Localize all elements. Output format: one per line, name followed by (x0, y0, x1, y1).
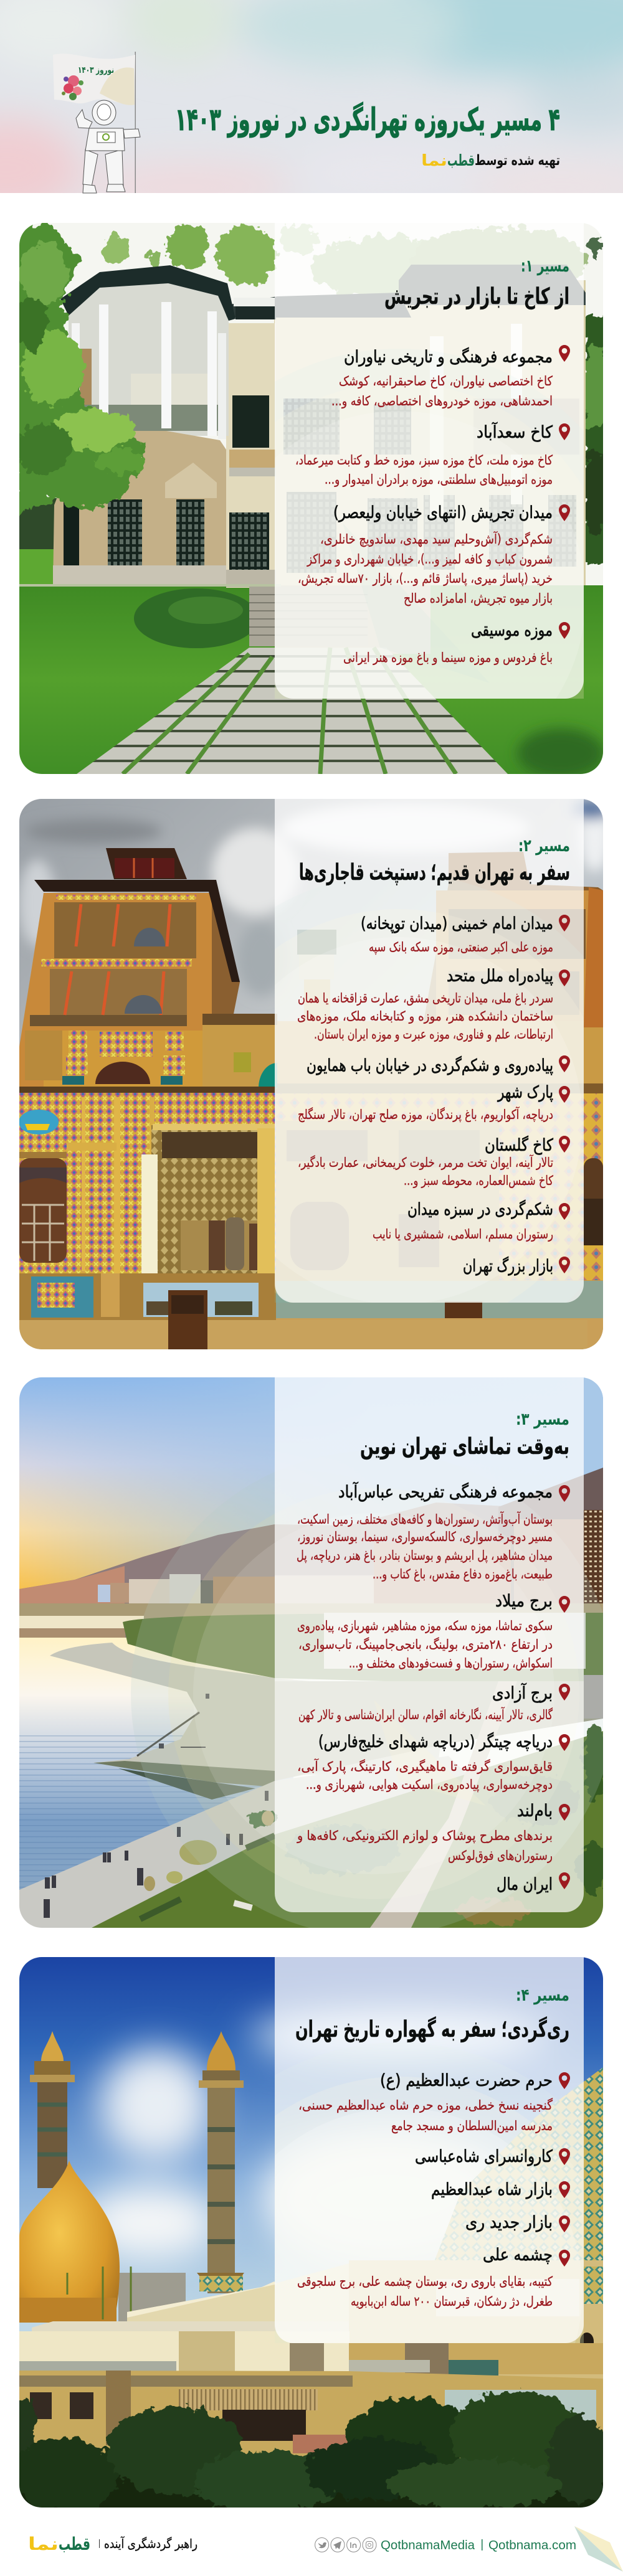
stop: Music museum (343, 621, 570, 665)
stairs (249, 587, 275, 646)
tower loggia (69, 283, 229, 436)
stop: Niavaran: احمدشاهی، موزه خودروهای اختصاصی، کافه و... (331, 394, 553, 408)
stop: Bab Homayoun: پیاده‌روی و شکم‌گردی در خیابان باب همایون (307, 1055, 553, 1075)
stop: Shrine: مدرسه امین‌السلطان و مسجد جامع (391, 2118, 553, 2133)
stop: Caravanserai: کاروانسرای شاه‌عباسی (415, 2147, 553, 2166)
paved path (77, 648, 508, 774)
panel: route 4 (275, 1957, 584, 2343)
stop: Bamland: برندهای مطرح پوشاک و لوازم الکترونیکی، کافه‌ها و (297, 1828, 553, 1843)
footer logo: قطب (59, 2534, 90, 2554)
photo: Chitgar lake (19, 1377, 617, 1937)
east wing (202, 1014, 277, 1088)
footer logo: نما (28, 2534, 59, 2554)
stop: Cheshmeh Ali: طغرل، دژ رشکان، قبرستان ۲۰۰ ساله ابن‌بابویه (351, 2294, 553, 2309)
stop: Bamland (297, 1801, 570, 1863)
park (123, 1613, 603, 1687)
pier (93, 1761, 275, 1787)
stop: Tajrish square: میدان تجریش (انتهای خیابان ولیعصر) (333, 503, 553, 522)
tile facade (19, 1087, 276, 1093)
stop: Cheshmeh Ali: کتیبه، بقایای باروی ری، بوستان چشمه علی، برج سلجوقی (297, 2274, 553, 2290)
stop: Azadi tower (298, 1683, 570, 1722)
footer handles (381, 2539, 576, 2552)
stop: Sabzeh Meydan (373, 1199, 570, 1242)
lake (19, 1638, 293, 1899)
cream upper roofs (127, 2263, 349, 2329)
logo: qotbnama: نما (421, 151, 447, 169)
people and trees (44, 1694, 269, 1918)
city blocks (98, 1585, 110, 1602)
photo: Niavaran palace (19, 223, 603, 774)
corner decoration (574, 2526, 623, 2572)
stop: Shrine: گنجینه نسخ خطی، موزه حرم شاه عبدالعظیم حسنی، (298, 2098, 553, 2113)
tower body (19, 893, 234, 1087)
stop: Shrine: حرم حضرت عبدالعظیم (ع) (380, 2071, 553, 2090)
stop: Abbas Abad (297, 1482, 570, 1582)
stop: Sabzeh Meydan: رستوران مسلم، اسلامی، شمشیری یا نایب (373, 1227, 553, 1242)
promenade (19, 1756, 473, 1928)
stop: Chitgar lake: دریاچه چیتگر (دریاچه شهدای خلیج‌فارس) (318, 1732, 553, 1752)
shore far (19, 1603, 603, 1619)
stop: Saadabad: کاخ موزه ملت، کاخ موزه سبز، موزه خط و کتابت میرعماد، (295, 453, 553, 468)
stop: Mellal Mottahed: ساختمان دانشکده هنر، موزه و کتابخانه ملک، موزه‌های (297, 1009, 553, 1024)
watermark (150, 2042, 623, 2541)
photo: Shah Abdol-Azim shrine (12, 1957, 623, 2541)
lantern turret (106, 848, 187, 879)
stop: Shahr park: دریاچه، آکواریوم، باغ پرندگان، موزه صلح تهران، تالار سنگلج (298, 1106, 553, 1122)
stop: Music museum: باغ فردوس و موزه سینما و باغ موزه هنر ایرانی (343, 650, 553, 665)
stop: Niavaran: کاخ اختصاصی نیاوران، کاخ صاحبقرانیه، کوشک (339, 374, 553, 389)
far wing under panel (275, 1021, 603, 1351)
stop: Milad tower: در ارتفاع ۲۸۰متری، بولینگ، بانجی‌جامپینگ، تاب‌سواری، (298, 1637, 553, 1652)
stop: Bamland: رستوران‌های فوق‌لوکس (448, 1848, 553, 1863)
right minaret (199, 2031, 244, 2293)
stop: Cheshmeh Ali: چشمه علی (483, 2245, 553, 2265)
stop: Niavaran: مجموعه فرهنگی و تاریخی نیاوران (344, 347, 553, 367)
prepared by line: تهیه شده توسط (475, 153, 560, 169)
right wing near (226, 323, 276, 588)
stop: Tajrish square: شمرون کباب و کافه لمیز و...)، خیابان شهرداری و مراکز (307, 552, 553, 567)
logo: qotbnama (421, 151, 475, 169)
stop: Golestan palace: کاخ گلستان (485, 1135, 553, 1155)
stop: Golestan palace: کاخ شمس‌العماره، محوطه سبز و... (404, 1173, 553, 1188)
card 1: Niavaran and Tajrish (19, 223, 603, 774)
tiled dome on the right (430, 2067, 603, 2273)
stop: Mellal Mottahed: ارتباطات، علم و فناوری، موزه عبرت و موزه ایران باستان. (314, 1027, 553, 1042)
panel: route 1 (275, 223, 584, 699)
lawn (19, 585, 603, 774)
icon: telegram (331, 2538, 345, 2552)
stop: Cheshmeh Ali (297, 2245, 570, 2309)
stop: Music museum: موزه موسیقی (471, 621, 553, 640)
route label: مسیر ۱: (521, 257, 569, 276)
lower tile band (19, 1273, 276, 1320)
stop: Shah Abdol-Azim bazaar: بازار شاه عبدالعظیم (431, 2180, 553, 2199)
grass (92, 1731, 603, 1928)
stop: Niavaran (331, 345, 570, 408)
stop: Tajrish square: شکم‌گردی (آش‌وحلیم سید مهدی، ساندویچ خانلری، (320, 531, 553, 547)
stop: Shahr park: پارک شهر (497, 1083, 553, 1102)
stop: Imam Khomeini square: میدان امام خمینی (میدان توپخانه) (361, 914, 553, 933)
card 4: Rey (12, 1957, 623, 2541)
social icons (315, 2538, 376, 2552)
stop: Iran Mall: ایران مال (497, 1875, 553, 1894)
foreground tree (16, 221, 146, 517)
footer tagline: راهبر گردشگری آینده (104, 2536, 197, 2551)
footer handles: Qotbnama.com (488, 2539, 576, 2552)
stop: Tajrish square: بازار میوه تجریش، امامزاده صالح (404, 591, 553, 606)
stop: Azadi tower: برج آزادی (492, 1683, 553, 1703)
icon: twitter (315, 2538, 329, 2552)
stop: Abbas Abad: میدان مشاهیر، پل ابریشم و بوستان بنادر، باغ هنر، دریاچه، پل (297, 1548, 553, 1564)
stop: Golestan palace (298, 1135, 570, 1188)
stop: Mellal Mottahed: سردر باغ ملی، میدان تاریخی مشق، عمارت قزاقخانه یا همان (298, 991, 553, 1006)
card 3: modern Tehran (19, 1377, 617, 1937)
logo: qotbnama: قطب (447, 151, 475, 169)
card 2: Qajar old Tehran (19, 797, 623, 1368)
panel: route 2 (275, 799, 584, 1303)
header background (0, 0, 623, 193)
upper loggias (54, 902, 196, 958)
bush (134, 588, 259, 648)
flag flowers (62, 75, 83, 100)
mosque side tower (118, 2273, 186, 2323)
sand spit (50, 1643, 449, 1775)
stop: Saadabad (295, 422, 570, 487)
stop: Abbas Abad: مسیر دوچرخه‌سواری، کالسکه‌سواری، سینما، بوستان نوروز، (297, 1529, 553, 1544)
trees (12, 2391, 611, 2516)
stop: Abbas Abad: طبیعت، باغ‌موزه دفاع مقدس، باغ کتاب و... (373, 1567, 553, 1582)
footer handles: QotbnamaMedia (381, 2539, 475, 2552)
photo: Golestan palace (19, 797, 623, 1368)
stop: Chitgar lake: قایق‌سواری گرفته تا ماهیگیری، کارتینگ، پارک آبی، (297, 1758, 553, 1774)
stop: Imam Khomeini square (361, 914, 570, 955)
watermark (275, 399, 584, 699)
stop: Grand bazaar: بازار بزرگ تهران (463, 1256, 553, 1276)
icon: linkedin (347, 2538, 361, 2552)
stop: Rey new bazaar: بازار جدید ری (465, 2213, 553, 2232)
route label: مسیر ۲: (518, 836, 570, 856)
stop: Milad tower: سکوی تماشا، موزه سکه، موزه مشاهیر، شهربازی، پیاده‌روی (297, 1618, 553, 1633)
stop: Shrine (298, 2071, 570, 2133)
stop: Milad tower: برج میلاد (495, 1592, 553, 1611)
flag with astronaut (53, 52, 140, 193)
stop: Tajrish square (298, 503, 570, 606)
flag text: نوروز ۱۴۰۳ (78, 65, 114, 75)
icon: instagram (363, 2538, 376, 2552)
golden dome (19, 2161, 120, 2321)
left minaret (30, 2031, 75, 2188)
tower base (54, 431, 226, 565)
stop: Tajrish square: خرید (پاساژ میری، پاساژ قائم و...)، بازار ۷۰ساله تجریش، (298, 571, 553, 587)
stop: Chitgar lake: دوچرخه‌سواری، پیاده‌روی، اسکیت هوایی، شهربازی و... (306, 1777, 553, 1792)
route label: مسیر ۳: (516, 1410, 569, 1429)
lower building (19, 2371, 603, 2466)
stop: Mellal Mottahed: پیاده‌راه ملل متحد (447, 966, 553, 986)
stop: Golestan palace: تالار آینه، ایوان تخت مرمر، خلوت کریمخانی، عمارت بادگیر، (298, 1154, 553, 1170)
stop: Milad tower (297, 1592, 570, 1671)
watermark (131, 1451, 617, 1937)
stop: Saadabad: موزه اتومبیل‌های سلطنتی، موزه برادران امیدوار و... (325, 472, 553, 487)
stop: Sabzeh Meydan: شکم‌گردی در سبزه میدان (407, 1199, 553, 1219)
stop: Saadabad: کاخ سعدآباد (477, 422, 553, 442)
wing behind (399, 280, 586, 585)
route label: مسیر ۴: (516, 1986, 569, 2005)
watermark (151, 874, 623, 1368)
stop: Imam Khomeini square: موزه علی اکبر صنعتی، موزه سکه بانک سپه (369, 940, 553, 955)
astronaut (76, 100, 140, 193)
stop: Abbas Abad: مجموعه فرهنگی تفریحی عباس‌آباد (338, 1482, 553, 1502)
stop: Milad tower: اسکواش، رستوران‌ها و فست‌فودهای مختلف و... (349, 1656, 553, 1671)
mirrored portico (151, 1125, 275, 1275)
stop: Shahr park (298, 1083, 570, 1122)
stop: Mellal Mottahed (297, 966, 570, 1042)
stop: Chitgar lake (297, 1732, 570, 1792)
stop: Bamland: بام‌لند (517, 1801, 553, 1821)
prepared by line (421, 151, 560, 169)
panel: route 3 (275, 1377, 584, 1912)
footer logo (28, 2534, 90, 2554)
